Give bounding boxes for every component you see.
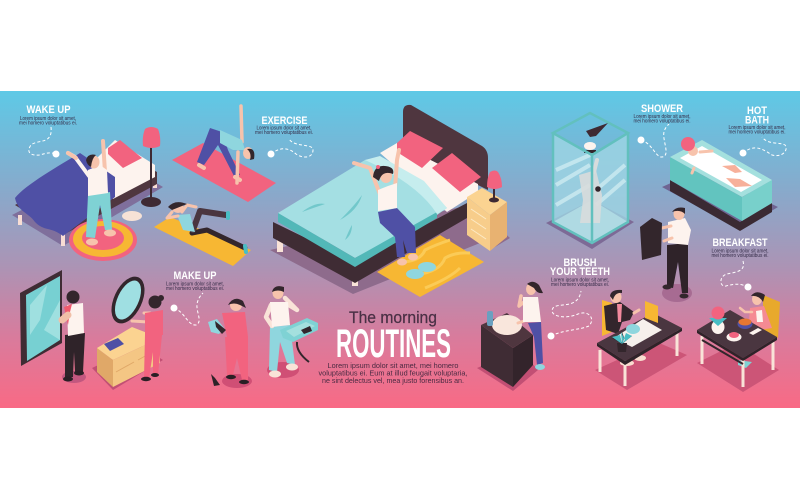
floor lamp — [141, 127, 161, 207]
glass panels — [553, 133, 628, 243]
heading: exercise — [255, 115, 313, 136]
scene: mirror and man — [20, 270, 86, 383]
heading: brush your teeth: YOUR TEETH — [550, 266, 610, 278]
foam — [680, 146, 762, 192]
heading: wake up — [19, 104, 77, 126]
woman at dresser — [132, 295, 164, 381]
yellow rug — [377, 235, 484, 297]
heading: hot bath: mei homero voluptatibus ei. — [728, 130, 786, 136]
heading: hot bath: HOT — [747, 105, 767, 117]
woman brushing — [518, 282, 545, 370]
tub — [670, 180, 740, 231]
woman in triangle pose — [197, 106, 254, 183]
round mirror — [105, 271, 151, 329]
round rug — [69, 219, 137, 261]
heading: brush your teeth — [550, 257, 610, 288]
connector: hot bath — [740, 137, 786, 156]
headboard — [403, 105, 488, 190]
wall mirror — [20, 270, 62, 366]
intro text: Lorem ipsum dolor sit amet, mei homero — [328, 361, 458, 370]
heading: breakfast: mei homero voluptatibus ei. — [712, 253, 768, 259]
heading: exercise: mei homero voluptatibus ei. — [255, 130, 313, 136]
intro text — [318, 361, 468, 385]
bather — [681, 137, 752, 187]
man dressing — [62, 290, 86, 383]
heading: breakfast — [712, 237, 768, 259]
title: The morning — [349, 309, 437, 327]
scene: hot bath — [662, 137, 778, 231]
connector: brush your teeth — [548, 291, 592, 340]
bottle — [487, 311, 493, 326]
shadow — [697, 343, 779, 392]
scene: breakfast woman — [697, 292, 780, 392]
placemat — [614, 319, 662, 347]
plant — [612, 332, 632, 352]
heading: breakfast: Lorem ipsum dolor sit amet, — [712, 248, 768, 254]
teal slippers — [406, 262, 436, 279]
shadow — [595, 342, 687, 390]
heading: breakfast: BREAKFAST — [712, 237, 768, 249]
intro text: voluptatibus ei. Eum at illud feugait voluptaria, — [318, 368, 468, 378]
shadow — [477, 350, 538, 391]
heading: make up: MAKE UP — [174, 270, 216, 282]
heading: hot bath: BATH — [745, 114, 769, 126]
title — [336, 309, 451, 366]
scene: dresser and woman — [92, 271, 164, 390]
heading: wake up: mei homero voluptatibus ei. — [19, 120, 77, 126]
heading: exercise: EXERCISE — [262, 115, 308, 127]
bed legs — [280, 238, 355, 286]
table — [597, 301, 682, 386]
heading: hot bath — [728, 105, 786, 136]
title: ROUTINES — [336, 322, 451, 366]
heading: brush your teeth: mei homero voluptatibus ei. — [551, 282, 609, 288]
slippers — [122, 211, 142, 221]
nightstand — [466, 188, 510, 251]
heading: wake up: Lorem ipsum dolor sit amet, — [20, 116, 76, 122]
man with jacket — [640, 208, 692, 302]
heading: wake up: WAKE UP — [26, 104, 70, 116]
woman doing crunches — [167, 202, 246, 252]
chair — [763, 295, 780, 338]
sheet — [380, 143, 478, 212]
food bowl — [738, 319, 752, 329]
heading: brush your teeth: BRUSH — [564, 257, 596, 269]
connector: shower — [638, 124, 669, 157]
shower head — [586, 123, 608, 137]
gradient background band — [0, 91, 800, 408]
heading: make up: mei homero voluptatibus ei. — [166, 286, 224, 292]
intro text: ne sint delectus vel, mea justo forensibus an. — [322, 376, 464, 385]
bed frame — [273, 203, 467, 283]
napkin — [749, 328, 762, 335]
man shaving at wash basin — [266, 286, 318, 378]
shadow — [662, 170, 778, 230]
vase with flowers — [712, 320, 724, 334]
scene: breakfast man — [595, 290, 687, 390]
heading: shower: mei homero voluptatibus ei. — [634, 118, 690, 124]
chair — [602, 300, 612, 336]
cereal box — [645, 301, 658, 323]
heading: exercise: Lorem ipsum dolor sit amet, — [256, 126, 312, 132]
connector: make up — [170, 293, 203, 325]
man stretching — [68, 141, 116, 246]
heading: make up: Lorem ipsum dolor sit amet, — [166, 282, 224, 288]
table lamp — [487, 170, 502, 202]
scene: shower cabin — [546, 113, 634, 249]
scene: wake up — [12, 127, 163, 261]
blanket — [278, 156, 447, 267]
yellow mat — [154, 217, 251, 266]
scene: brush teeth at sink — [477, 282, 545, 391]
glass reflections — [556, 155, 625, 205]
bed — [12, 140, 163, 246]
pink mat — [172, 143, 276, 202]
table — [697, 306, 777, 387]
person in shower — [579, 142, 602, 223]
heading: shower: Lorem ipsum dolor sit amet, — [634, 114, 690, 120]
connector: exercise — [268, 139, 313, 158]
floor shadow — [270, 205, 500, 294]
man seated — [604, 290, 646, 366]
scene: exercise — [154, 106, 276, 266]
woman with shoe — [208, 299, 252, 388]
woman sitting on bed — [354, 150, 418, 266]
heading: brush your teeth: Lorem ipsum dolor sit amet, — [551, 278, 609, 284]
connector: wake up — [29, 127, 60, 158]
cabinet — [481, 313, 533, 387]
plate — [726, 332, 742, 342]
cabin frame — [553, 113, 628, 243]
dresser — [92, 327, 163, 390]
connector: breakfast — [721, 261, 752, 290]
scene: main bed — [270, 105, 510, 297]
heading: shower: SHOWER — [641, 103, 683, 115]
heading: make up — [166, 270, 224, 292]
heading: hot bath: Lorem ipsum dolor sit amet, — [728, 125, 786, 131]
heading: shower — [634, 103, 690, 124]
shadow — [546, 200, 634, 249]
wash basin — [280, 318, 318, 342]
pink pillows — [397, 131, 481, 192]
woman seated — [738, 292, 772, 368]
